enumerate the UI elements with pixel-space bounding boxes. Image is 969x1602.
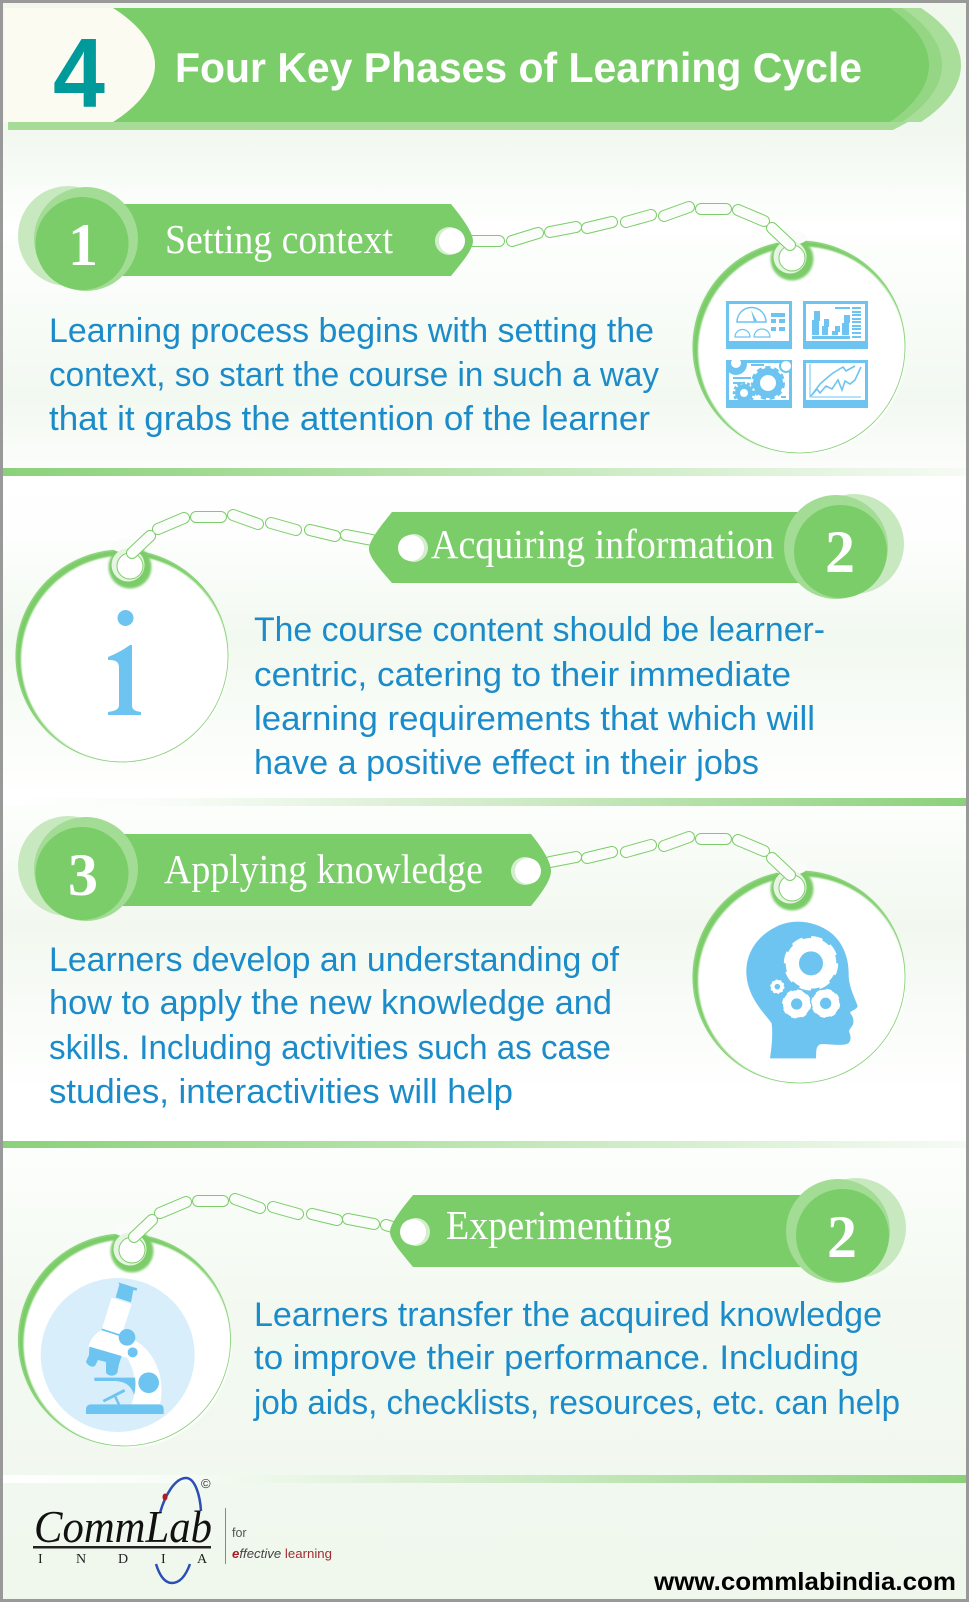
tag 3 disc — [693, 871, 906, 1084]
body text 2: have a positive effect in their jobs — [254, 744, 759, 782]
tag 2 disc — [16, 550, 229, 764]
tagline — [232, 1526, 332, 1561]
logo India: I — [38, 1552, 43, 1567]
logo India — [38, 1552, 208, 1567]
heading pill 3 — [18, 816, 551, 921]
icon: gauges panel — [726, 301, 792, 349]
logo wordmark: CommLab — [34, 1501, 212, 1552]
chain 2 — [132, 515, 449, 553]
body text 1: Learning process begins with setting the — [49, 312, 654, 350]
icon: dashboards — [725, 301, 868, 408]
footer logo — [33, 1476, 332, 1583]
body text 3: Learners develop an understanding of — [49, 941, 620, 979]
heading pill 1: Setting context — [165, 216, 394, 262]
tag 4 disc — [18, 1234, 232, 1448]
body text 2 — [254, 611, 825, 782]
body text 3: how to apply the new knowledge and — [49, 984, 612, 1022]
chain 1 — [473, 207, 790, 245]
body text 3: studies, interactivities will help — [49, 1073, 513, 1111]
heading pill 1 — [18, 186, 473, 291]
icon: microscope — [41, 1278, 195, 1432]
logo red dot — [162, 1494, 168, 1500]
tagline: for — [232, 1526, 247, 1540]
tag 1 disc — [693, 241, 906, 454]
tag 3 ring — [770, 861, 814, 910]
icon: line chart panel — [803, 360, 868, 408]
copyright mark: © — [201, 1476, 211, 1491]
logo ellipse arcs — [156, 1478, 201, 1583]
body text 3: skills. Including activities such as case — [49, 1029, 611, 1067]
body text 1: that it grabs the attention of the learner — [49, 400, 650, 438]
panel: phase 1 setting context — [18, 186, 906, 454]
heading pill 4: 2 — [827, 1204, 857, 1270]
title number 4: 4 — [53, 18, 105, 128]
tag 4 ring — [110, 1223, 154, 1272]
heading pill 1: 1 — [68, 212, 98, 278]
heading pill 4: Experimenting — [446, 1202, 672, 1248]
body text 4: Learners transfer the acquired knowledge — [254, 1296, 882, 1334]
panel: phase 4 experimenting — [18, 1178, 906, 1448]
heading pill 3: Applying knowledge — [164, 846, 483, 892]
icon: gears panel — [726, 360, 792, 408]
heading pill 2: 2 — [825, 519, 855, 585]
chain 3 — [473, 837, 790, 875]
body text 4 — [253, 1296, 900, 1422]
logo India: N — [76, 1552, 86, 1567]
body text 4: job aids, checklists, resources, etc. can help — [253, 1384, 900, 1422]
logo India: D — [118, 1552, 128, 1567]
panel: phase 3 applying knowledge — [18, 816, 906, 1111]
body text 2: learning requirements that which will — [254, 700, 815, 738]
header banner — [4, 8, 961, 130]
icon: information i — [108, 610, 141, 715]
heading pill 2 — [369, 494, 904, 599]
heading pill 2: Acquiring information — [431, 521, 774, 567]
heading pill 3: 3 — [68, 842, 98, 908]
body text 2: The course content should be learner- — [254, 611, 825, 649]
panel: phase 2 acquiring information — [16, 494, 904, 782]
body text 1: context, so start the course in such a way — [49, 356, 659, 394]
icon: bar chart panel — [803, 301, 868, 349]
website url: www.commlabindia.com — [653, 1568, 956, 1596]
icon: head with gears — [746, 922, 858, 1058]
title: Four Key Phases of Learning Cycle — [175, 44, 862, 91]
body text 3 — [49, 941, 620, 1111]
body text 4: to improve their performance. Including — [254, 1339, 859, 1377]
tagline: effective learning — [232, 1547, 332, 1561]
logo India: I — [161, 1552, 166, 1567]
chain 4 — [134, 1199, 451, 1237]
tag 2 ring — [108, 539, 152, 588]
tag 1 ring — [770, 231, 814, 280]
logo India: A — [197, 1552, 208, 1567]
body text 1 — [49, 312, 659, 438]
body text 2: centric, catering to their immediate — [254, 656, 791, 694]
heading pill 4 — [390, 1178, 906, 1283]
